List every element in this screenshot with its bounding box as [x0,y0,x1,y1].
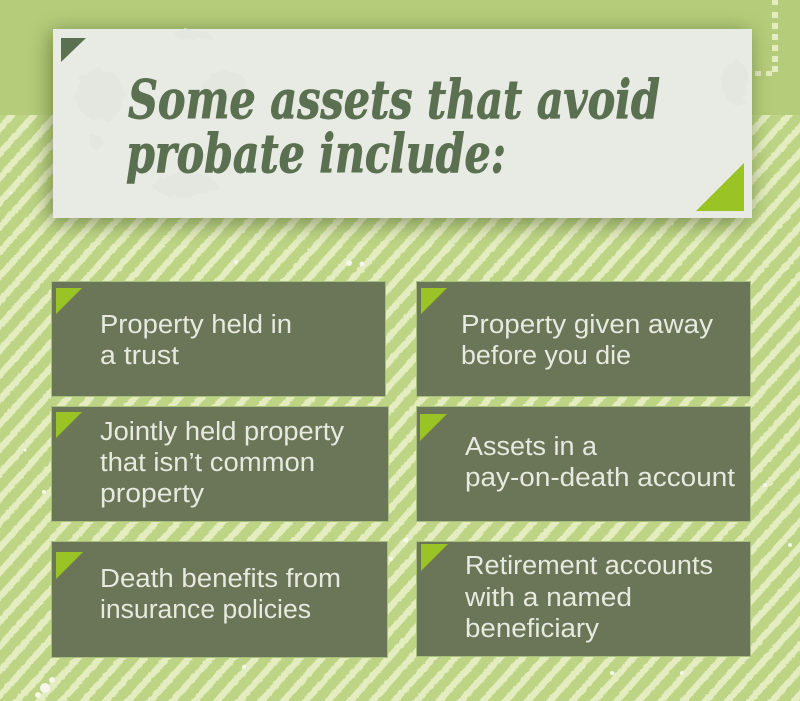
card text: a trust [100,342,179,370]
card text: Property given away [461,311,713,339]
card text: Death benefits from [100,565,341,593]
dotted line decoration [755,0,778,76]
card: death benefits [52,542,388,658]
card text: Jointly held property [100,418,344,446]
card: property held in a trust [52,282,386,396]
card: retirement accounts [416,542,750,656]
heading: Some assets that avoid [128,69,660,131]
card text: that isn’t common [100,449,315,477]
top green band [0,0,800,115]
card: pay-on-death account [416,406,750,522]
title panel [50,29,752,222]
card text: Retirement accounts [465,552,713,580]
card text: pay-on-death account [465,464,735,492]
card accent triangle [56,552,83,579]
panel grunge texture [76,30,748,197]
paint specks [10,192,792,698]
card accent triangle [421,544,448,571]
card text: beneficiary [465,615,599,643]
card text: before you die [461,342,631,370]
card text: with a named [464,584,632,612]
card text: Assets in a [465,433,598,461]
card text: property [100,480,204,508]
card accent triangle [56,288,82,314]
card: property given away [416,282,750,396]
card text: insurance policies [100,596,311,624]
heading: probate include: [126,123,506,185]
card accent triangle [56,412,82,438]
card text: Property held in [100,311,292,339]
card accent triangle [420,414,447,441]
corner triangle: bottom right [696,163,744,211]
card: jointly held property [52,406,388,522]
corner triangle: top left [61,38,86,62]
card accent triangle [421,288,447,314]
